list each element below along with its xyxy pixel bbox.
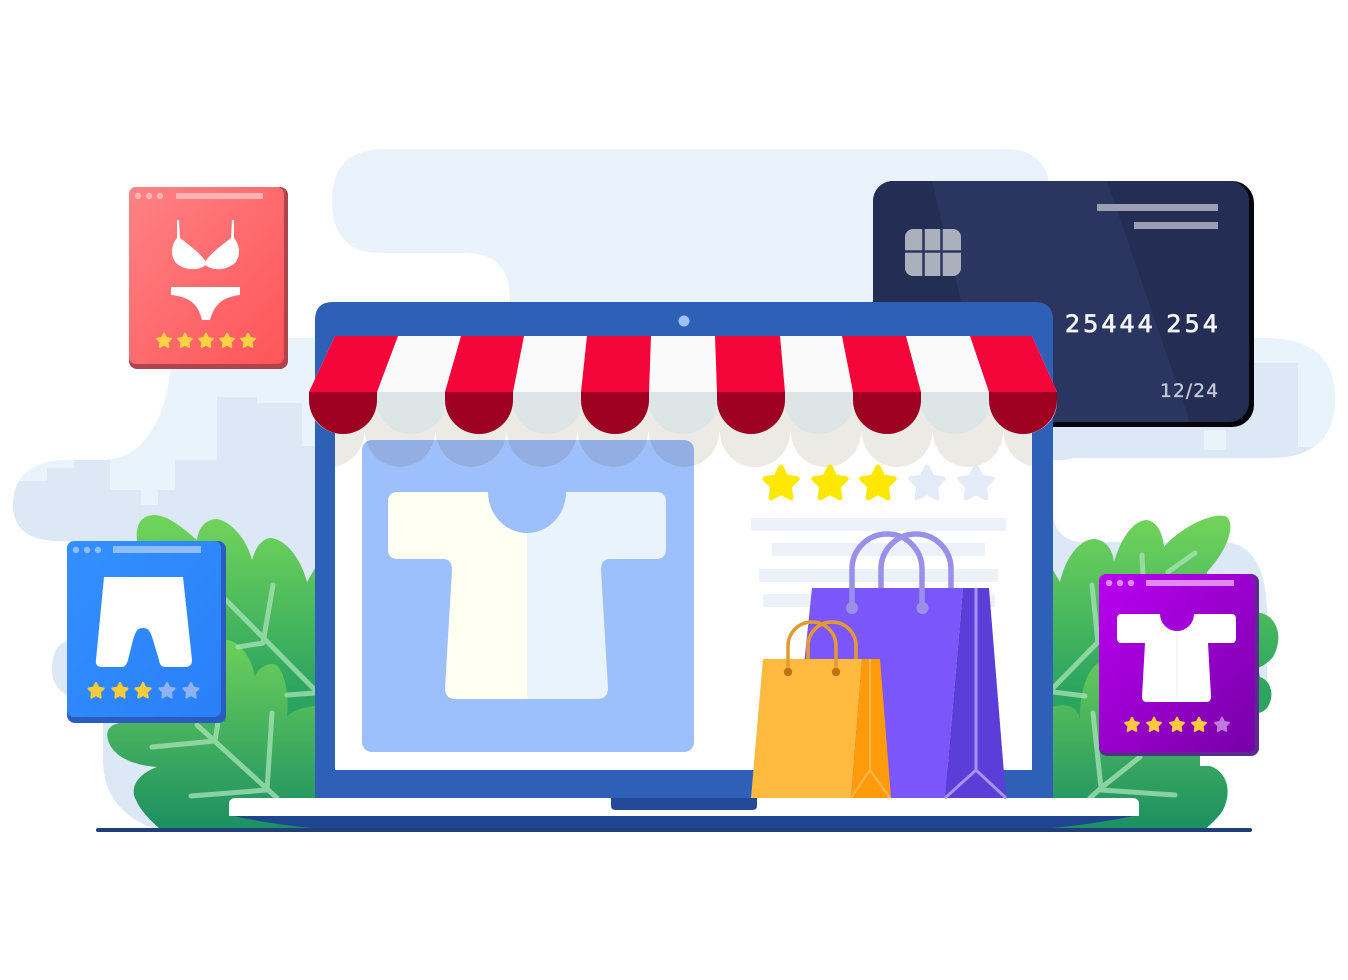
card chip [905, 229, 961, 276]
large purple shopping bag [790, 534, 1006, 798]
credit card [873, 181, 1254, 427]
background cloud: left with city silhouette [0, 330, 320, 840]
awning shadow [335, 405, 1032, 467]
card expiry: 12/24 [1160, 381, 1218, 402]
card number: 25444 254 [1065, 310, 1218, 338]
rating stars [765, 467, 992, 498]
product panel [362, 440, 694, 752]
description text lines [751, 518, 1006, 607]
ground line [96, 828, 1252, 832]
background cloud: lower right [1045, 518, 1267, 700]
right plant [1050, 516, 1278, 829]
product card: shorts [67, 541, 226, 723]
laptop screen frame [315, 302, 1053, 800]
laptop [229, 302, 1139, 831]
icon: shirt [1117, 614, 1236, 702]
screen [335, 336, 1032, 770]
small orange shopping bag [751, 622, 891, 798]
laptop base [229, 798, 1139, 831]
product card: lingerie [129, 187, 288, 369]
icon: bra and briefs [171, 220, 240, 320]
t-shirt [388, 491, 666, 699]
card signature lines [1097, 204, 1218, 229]
icon: shorts [96, 577, 192, 667]
camera [678, 316, 690, 326]
background cloud: right with city silhouette [1053, 338, 1335, 460]
product card: shirt [1099, 574, 1259, 756]
background cloud: top [332, 149, 1050, 340]
left plant [107, 515, 315, 829]
shop awning [309, 336, 1057, 434]
